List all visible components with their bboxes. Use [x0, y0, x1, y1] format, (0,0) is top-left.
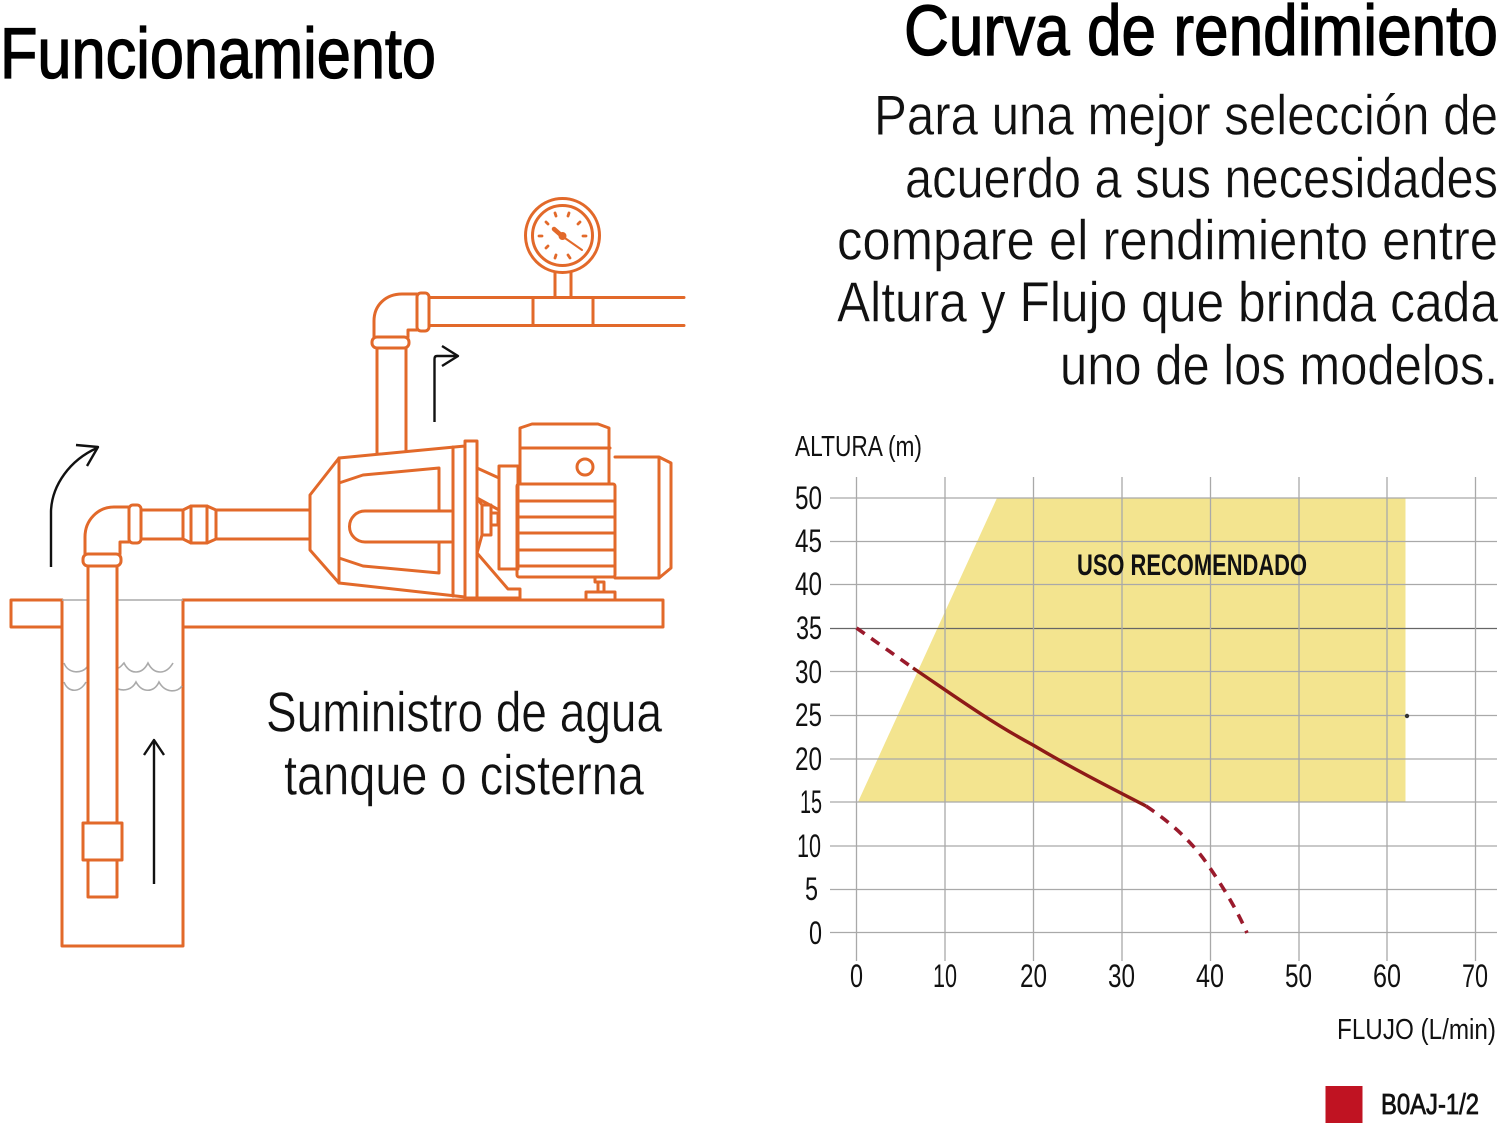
legend [1326, 1086, 1479, 1123]
y axis labels: 0 [809, 915, 822, 951]
heading: Funcionamiento: Funcionamiento [0, 15, 436, 94]
x axis labels: 30 [1108, 958, 1135, 994]
x axis labels: 20 [1020, 958, 1047, 994]
x axis labels: 70 [1462, 958, 1488, 994]
y axis labels: 10 [797, 828, 821, 864]
suction pipe and foot valve [83, 505, 310, 897]
x axis labels [850, 958, 1488, 994]
text block: selection note [837, 84, 1498, 398]
grid lines [830, 477, 1497, 961]
discharge pipe [372, 293, 684, 453]
label: recommended use: USO RECOMENDADO [1077, 549, 1307, 582]
legend label: B0AJ-1/2 [1381, 1089, 1479, 1121]
text block: supply caption [266, 680, 662, 808]
y axis labels: 25 [795, 697, 822, 733]
text block: supply caption: tanque o cisterna [284, 744, 644, 808]
motor [499, 424, 671, 598]
y axis labels: 45 [795, 523, 822, 559]
y axis labels: 20 [795, 741, 822, 777]
diagram: pump installation [11, 198, 684, 946]
water surface lines [62, 600, 183, 691]
x axis labels: 60 [1373, 958, 1401, 994]
y axis labels: 30 [795, 654, 822, 690]
y axis labels: 5 [805, 871, 818, 907]
x axis labels: 50 [1285, 958, 1312, 994]
x axis labels: 10 [933, 958, 957, 994]
arrow: up inside well [144, 740, 164, 884]
arrow: curved up from well [51, 445, 98, 567]
text block: supply caption: Suministro de agua [266, 680, 662, 744]
recommended use area [858, 498, 1406, 802]
pump body [310, 441, 520, 598]
axis title: height: ALTURA (m) [795, 431, 922, 463]
legend swatch [1326, 1086, 1362, 1123]
y axis labels: 40 [795, 566, 822, 602]
y axis labels: 15 [800, 784, 822, 820]
well and ground [11, 600, 663, 946]
pump curve dashed [856, 628, 1247, 933]
y axis labels [795, 480, 822, 951]
icon: pressure gauge [526, 198, 600, 297]
pump curve solid [913, 668, 1146, 806]
y axis labels: 35 [796, 610, 822, 646]
y axis labels: 50 [795, 480, 822, 516]
chart: performance curve [795, 431, 1497, 1046]
arrow: up and right over pump [434, 346, 458, 422]
x axis labels: 40 [1196, 958, 1224, 994]
marker dot [1405, 714, 1409, 718]
x axis labels: 0 [850, 958, 863, 994]
